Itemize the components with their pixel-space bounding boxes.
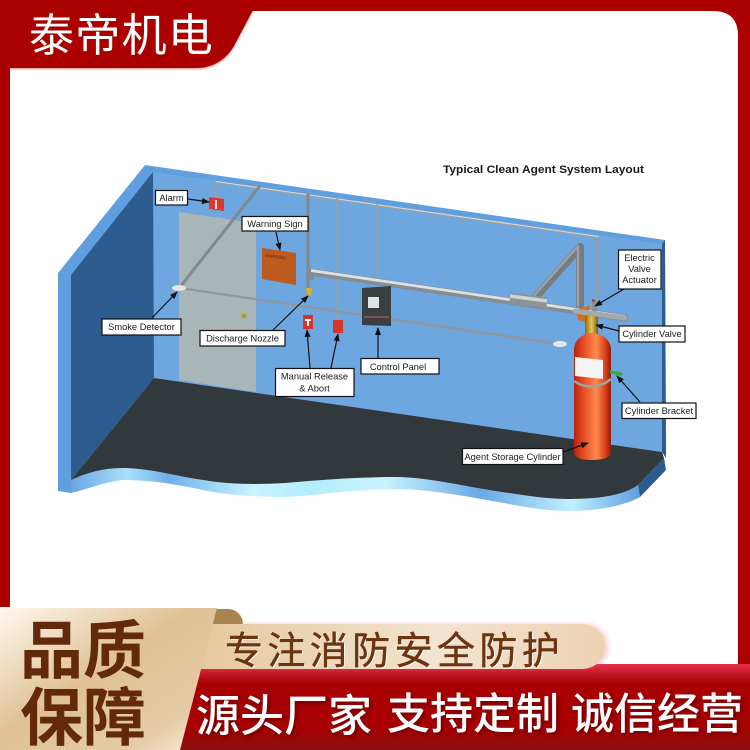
label: warning sign [242, 216, 308, 250]
brand name: 泰帝机电 [29, 0, 214, 64]
diagonal header pipe [531, 246, 580, 305]
floor [71, 378, 664, 499]
label: electric valve actuator: Valve [628, 264, 651, 274]
label: electric valve actuator: Electric [624, 253, 655, 263]
label: cylinder valve [596, 325, 685, 342]
brand banner [10, 11, 255, 70]
tab behind quality panel [205, 609, 243, 624]
control panel [362, 286, 391, 326]
label: manual release and abort: Manual Release [281, 372, 348, 382]
title: Typical Clean Agent System Layout [443, 164, 644, 176]
label: agent storage cylinder [462, 443, 588, 464]
selling point 2: 支持定制 [387, 680, 559, 742]
bottom ribbon: red band [180, 664, 750, 750]
conduit network [180, 182, 598, 343]
label: manual release and abort: & Abort [299, 384, 330, 394]
right edge of floor [638, 458, 666, 497]
label: agent storage cylinder: Agent Storage Cylinder [464, 452, 561, 462]
cylinder valve and actuator [576, 299, 598, 336]
quality heading line 1: 品质 [20, 601, 146, 692]
label: manual release and abort [276, 330, 354, 396]
warning sign: WARNING [265, 253, 287, 261]
label: discharge nozzle [200, 296, 308, 346]
label: cylinder bracket: Cylinder Bracket [625, 406, 694, 416]
label: control panel [361, 328, 439, 374]
selling point 3: 诚信经营 [571, 680, 743, 742]
alarm [209, 197, 224, 211]
label: electric valve actuator: Actuator [622, 275, 657, 285]
main pipe [311, 270, 625, 318]
smoke detectors [172, 285, 567, 347]
label: cylinder valve: Cylinder Valve [622, 329, 682, 339]
label: alarm [156, 190, 209, 205]
discharge nozzle [306, 288, 312, 296]
slogan: 专注消防安全防护 [225, 620, 564, 675]
agent storage cylinder [574, 333, 623, 460]
room walls [58, 165, 666, 493]
floor edge strip [71, 468, 640, 511]
label: smoke detector: Smoke Detector [108, 322, 175, 332]
warning sign [262, 248, 296, 285]
label: alarm: Alarm [159, 193, 184, 203]
label: control panel: Control Panel [370, 362, 426, 372]
label: smoke detector [102, 292, 181, 335]
label: cylinder bracket [617, 376, 696, 418]
label: warning sign: Warning Sign [247, 219, 303, 229]
selling point 1: 源头厂家 [196, 680, 372, 744]
bottom ribbon: tan pill [190, 624, 605, 669]
top of main pipe over valve [575, 311, 625, 318]
door [179, 212, 256, 392]
label: discharge nozzle: Discharge Nozzle [206, 334, 279, 344]
label: electric valve actuator [595, 250, 661, 306]
manual release [303, 315, 343, 333]
